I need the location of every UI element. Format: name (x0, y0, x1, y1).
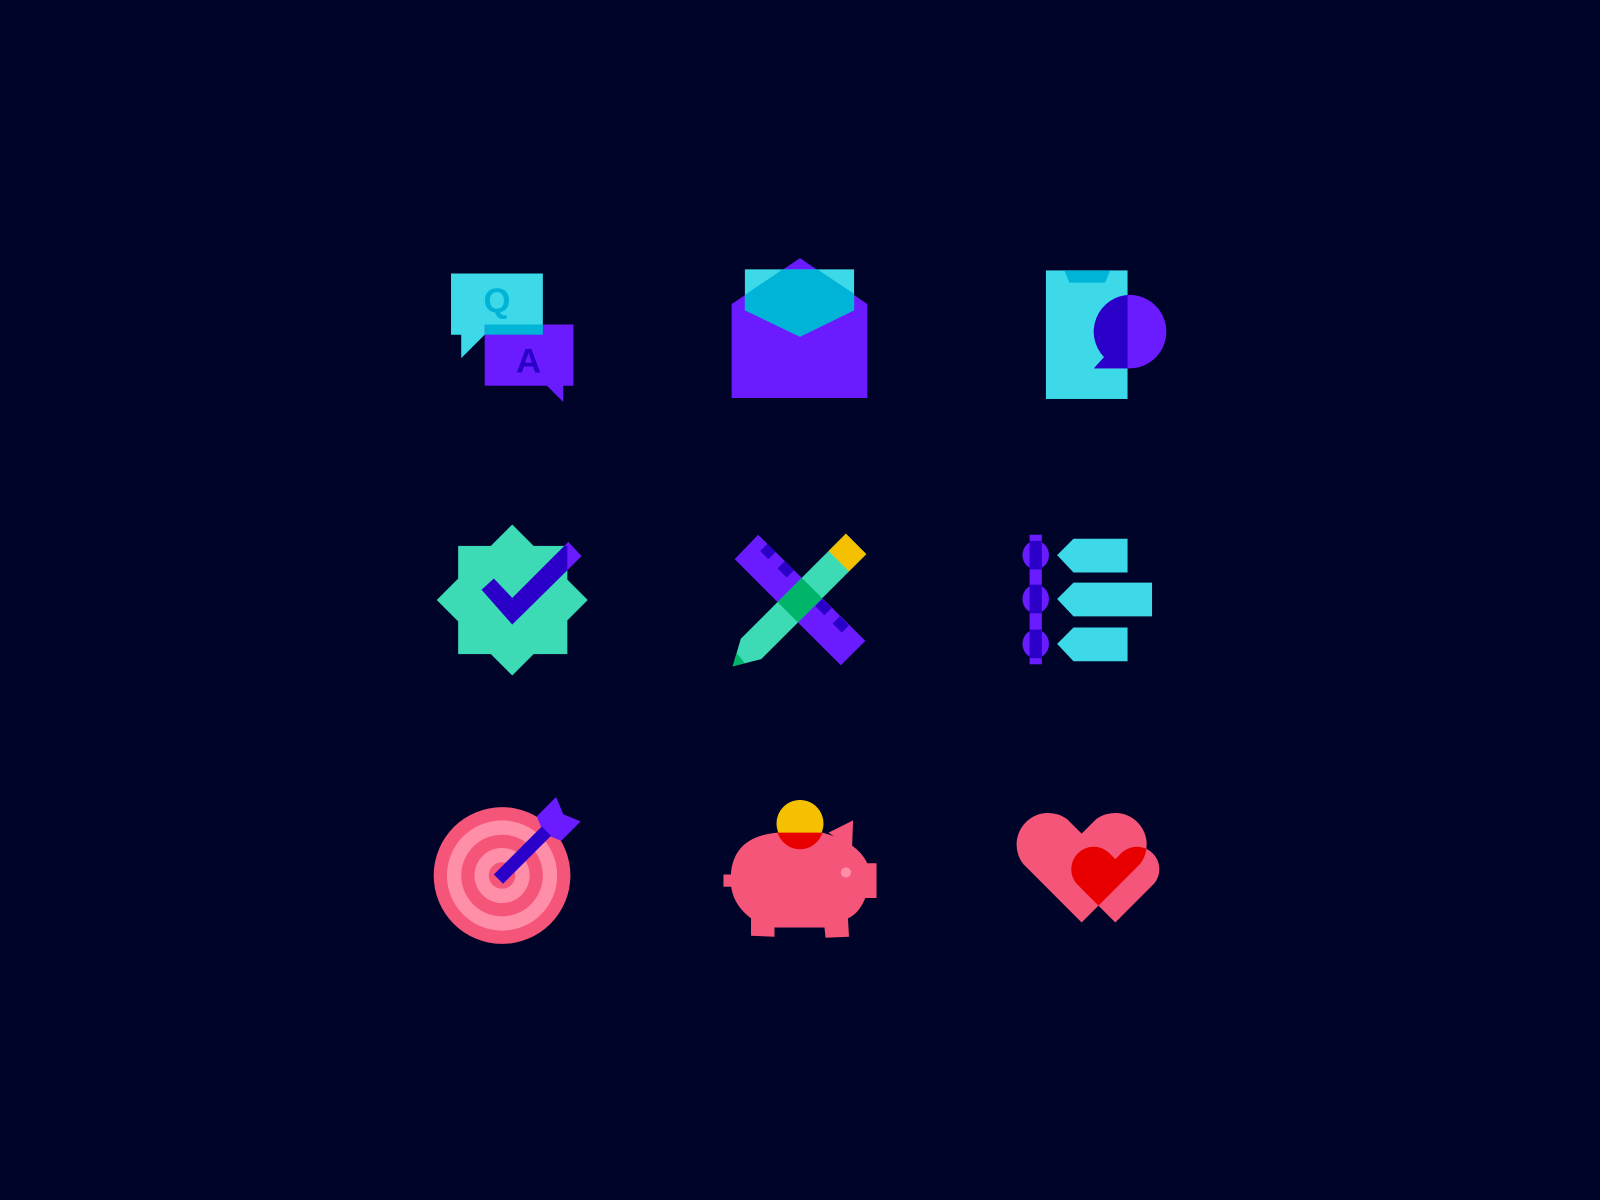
icon: Q&A speech bubbles: A (516, 342, 541, 380)
icon: target with arrow (434, 797, 581, 944)
icon: open envelope (732, 258, 867, 398)
icon: Q&A speech bubbles (451, 273, 573, 402)
icon: Q&A speech bubbles: Q (483, 282, 510, 320)
icon: two hearts (1017, 813, 1159, 922)
icon: verified badge (437, 524, 588, 676)
icon: phone with chat bubble (1046, 270, 1166, 399)
icon: pencil and ruler (733, 534, 866, 666)
icon: piggy bank (723, 800, 877, 938)
icon: list with timeline (1022, 535, 1152, 664)
